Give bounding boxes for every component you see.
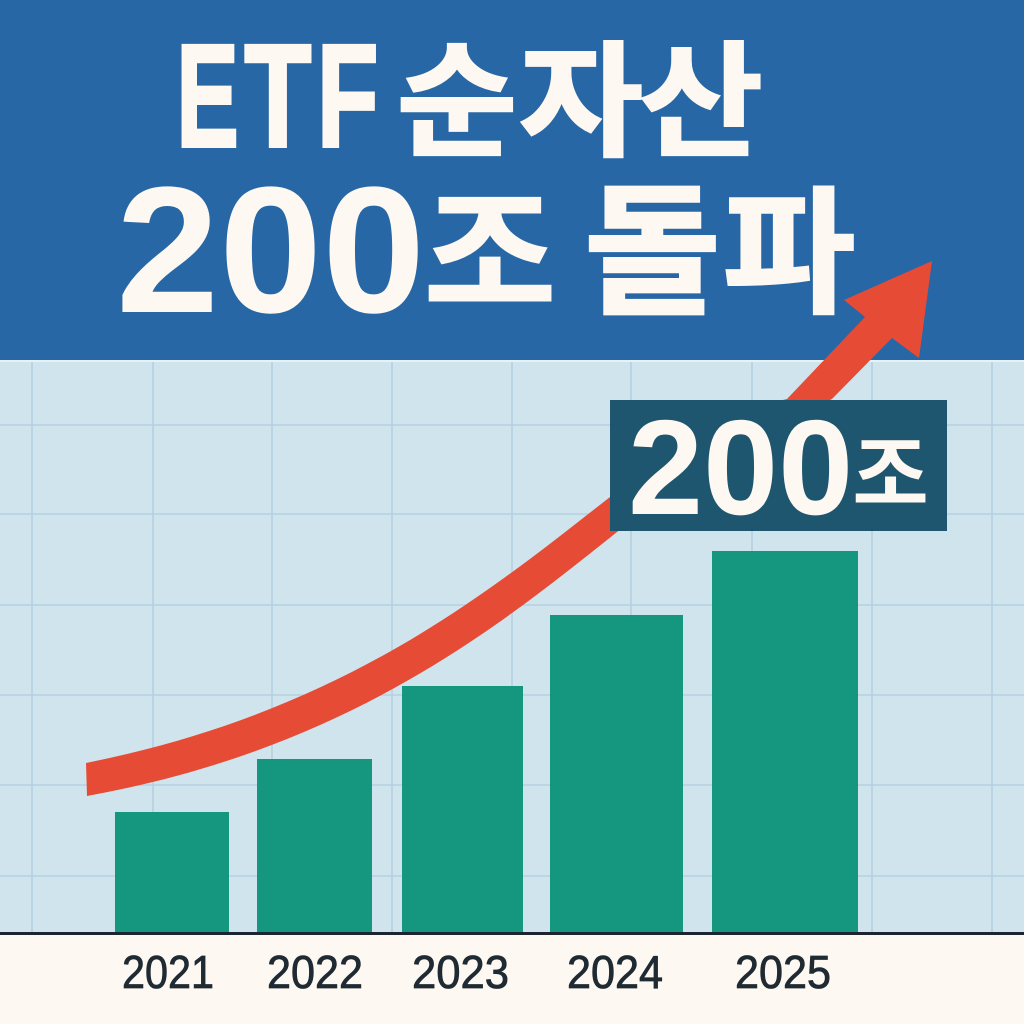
title line 1	[176, 13, 763, 179]
title line 2: 조	[424, 179, 556, 332]
year labels: 2022	[267, 946, 363, 998]
title line 2	[116, 149, 856, 350]
chart background	[0, 360, 1024, 933]
callout: 200조: 200	[628, 392, 853, 543]
growth arrow	[86, 261, 932, 796]
title line 1: 자	[519, 33, 643, 173]
title line 2: 돌	[584, 174, 721, 334]
year axis	[0, 932, 1024, 1024]
year labels: 2025	[735, 946, 831, 998]
callout: 200조: 조	[852, 429, 929, 522]
title line 1: 순	[396, 34, 518, 173]
callout: 200조	[610, 392, 947, 543]
title line 1: 산	[639, 33, 763, 173]
year labels	[122, 946, 831, 998]
title line 2: 파	[722, 177, 856, 331]
title banner	[0, 0, 1024, 362]
year labels: 2024	[567, 946, 663, 998]
bar chart	[115, 551, 858, 933]
title line 1: E	[176, 14, 239, 179]
year labels: 2023	[412, 946, 509, 998]
title line 1: T	[244, 13, 312, 178]
title line 2: 200	[116, 149, 425, 350]
year labels: 2021	[122, 946, 214, 998]
title line 1: F	[317, 14, 379, 178]
